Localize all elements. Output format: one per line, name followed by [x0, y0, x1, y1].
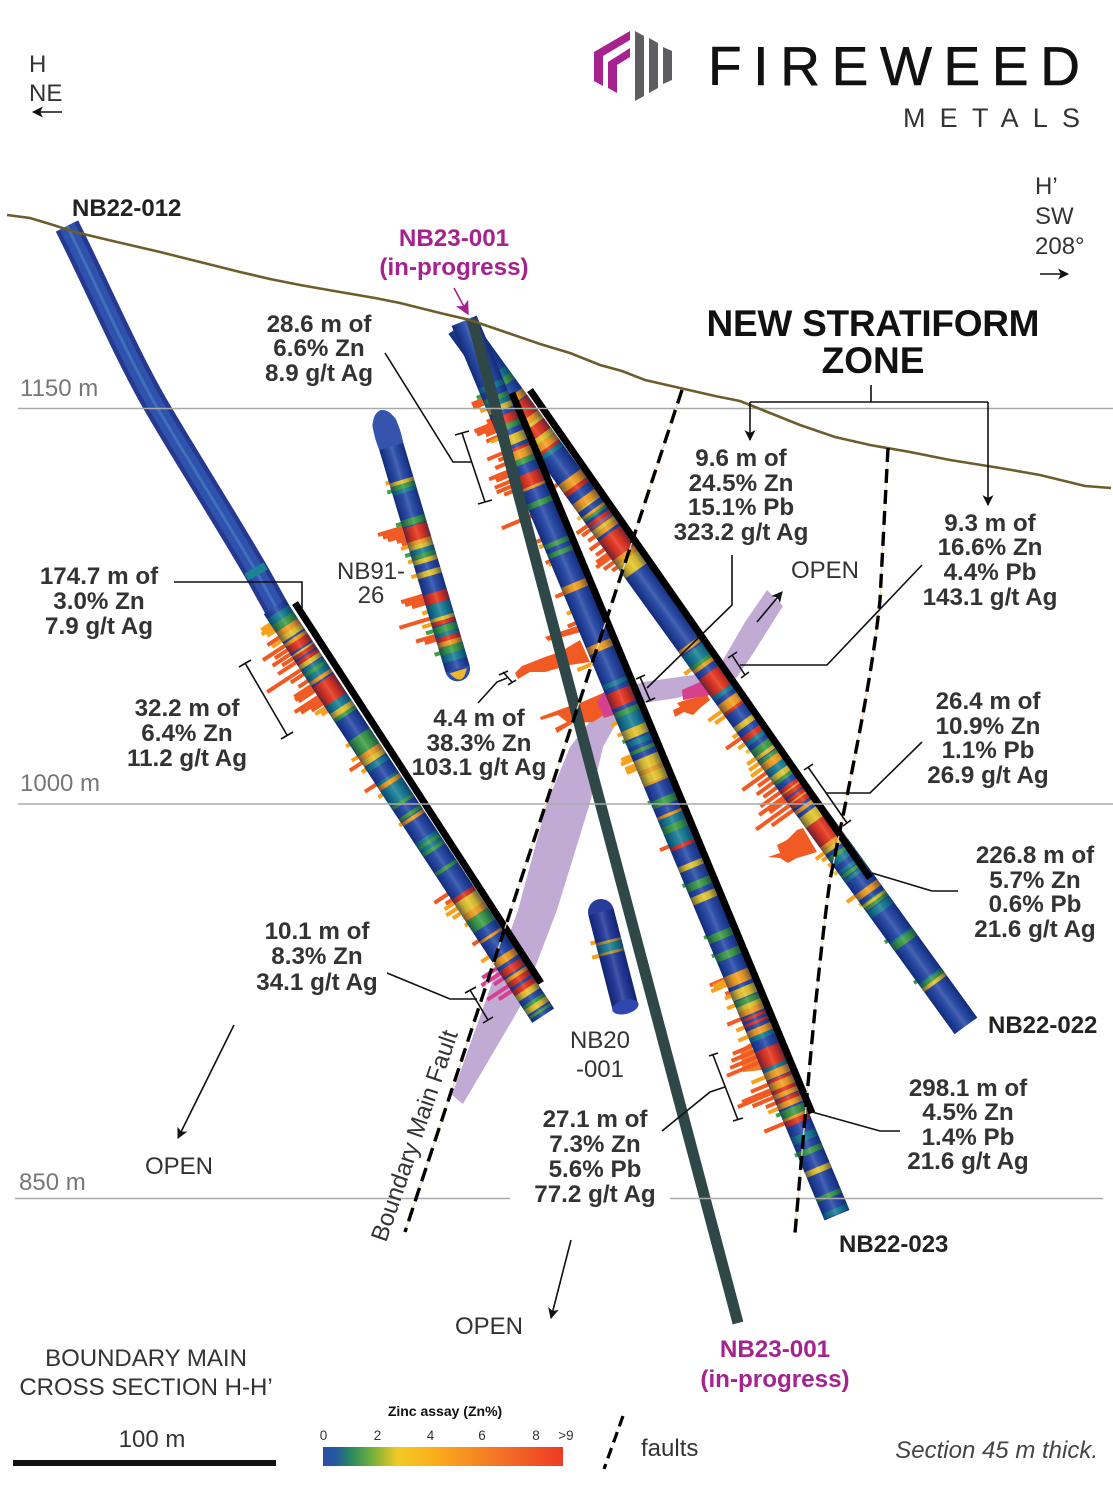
callout 28.6 m [265, 311, 492, 504]
fault: left dashed [405, 390, 682, 1232]
callout 32.2 m: 32.2 m of [135, 695, 240, 722]
callout 32.2 m: 6.4% Zn [141, 720, 233, 747]
hole label NB23-001 top: (in-progress) [379, 254, 529, 281]
callout 9.6 m: 9.6 m of [695, 445, 788, 472]
black intercept bar NB22-023 [512, 393, 812, 1113]
callout 298.1 m: 4.5% Zn [922, 1099, 1014, 1126]
section thickness note: Section 45 m thick. [895, 1437, 1098, 1464]
callout 298.1 m: 21.6 g/t Ag [907, 1148, 1029, 1175]
hole label NB22-023: NB22-023 [839, 1231, 948, 1258]
legend: zinc assay colour scale: 4 [427, 1428, 435, 1443]
legend: faults [604, 1416, 698, 1469]
section end label H NE: H [29, 51, 46, 78]
open label lower left: OPEN [145, 1153, 213, 1180]
hole label NB23-001 top: NB23-001 [399, 225, 509, 252]
elevation labels [19, 375, 100, 1196]
section end label H' SW: H’ [1035, 173, 1058, 200]
callout 9.3 m [728, 510, 1057, 678]
callout 4.4 m: 4.4 m of [433, 705, 526, 732]
elevation gridlines [15, 408, 1113, 1198]
heading: new stratiform zone: ZONE [822, 340, 924, 381]
hole label NB22-012: NB22-012 [72, 195, 181, 222]
callout 174.7 m [40, 563, 302, 640]
callout 4.4 m [412, 671, 546, 781]
open label and arrow: hole NE: OPEN [791, 557, 859, 584]
callout 26.4 m: 26.9 g/t Ag [927, 762, 1049, 789]
fault name label: Boundary Main Fault [366, 1026, 464, 1245]
legend: zinc assay colour scale [320, 1403, 574, 1466]
elevation labels: 850 m [19, 1169, 86, 1196]
callout 27.1 m: 7.3% Zn [549, 1131, 641, 1158]
logo wordmark: METALS [903, 103, 1080, 133]
section end label H' SW [1035, 173, 1085, 274]
callout 9.6 m: 323.2 g/t Ag [674, 519, 808, 546]
drill hole NB22-023 [418, 316, 849, 1234]
drill hole NB22-022 [415, 317, 977, 1058]
section title: BOUNDARY MAIN [45, 1345, 247, 1372]
mineralized segment NB22-012 [230, 600, 554, 1045]
callout 226.8 m [872, 842, 1096, 943]
arrow: open lower left [178, 1025, 234, 1138]
callout 226.8 m: 5.7% Zn [989, 867, 1081, 894]
hole label NB91-26: 26 [358, 582, 384, 609]
drill hole NB22-012 [67, 226, 554, 1045]
callout 28.6 m: 28.6 m of [267, 311, 372, 338]
open label bottom: OPEN [455, 1313, 523, 1340]
section end label H NE [29, 51, 62, 112]
section title [19, 1345, 273, 1401]
callout 26.4 m: 26.4 m of [936, 688, 1041, 715]
fault: right dashed [795, 448, 888, 1233]
callout 9.3 m: 4.4% Pb [944, 559, 1036, 586]
elevation labels: 1150 m [20, 375, 98, 402]
callout 298.1 m: 298.1 m of [909, 1075, 1028, 1102]
logo wordmark: FIREWEED [708, 35, 1080, 97]
heading: new stratiform zone [706, 303, 1040, 381]
legend: faults: faults [641, 1435, 698, 1462]
section end label H' SW: SW [1035, 203, 1074, 230]
hole label NB20-001: NB20 [570, 1027, 630, 1054]
black intercept bar NB22-012 [295, 603, 541, 983]
callout 4.4 m: 38.3% Zn [427, 730, 531, 757]
elevation labels: 1000 m [20, 770, 100, 797]
callout 32.2 m: 11.2 g/t Ag [127, 745, 247, 772]
scale bar 100 m: 100 m [119, 1426, 185, 1453]
black intercept bar NB22-022 [530, 390, 870, 878]
callout 4.4 m: 103.1 g/t Ag [412, 754, 546, 781]
callout 27.1 m: 77.2 g/t Ag [534, 1181, 656, 1208]
legend: zinc assay colour scale: 6 [478, 1428, 486, 1443]
callout 226.8 m: 0.6% Pb [989, 891, 1081, 918]
section end label H' SW: 208° [1035, 233, 1085, 260]
legend: zinc assay colour scale: 0 [320, 1428, 327, 1443]
hole label NB20-001 [570, 1027, 630, 1083]
logo wordmark [708, 35, 1080, 133]
callout 9.3 m: 143.1 g/t Ag [923, 584, 1057, 611]
legend: zinc assay colour scale: 2 [374, 1428, 381, 1443]
callout 32.2 m [127, 660, 293, 772]
legend: zinc assay colour scale: 8 [532, 1428, 540, 1443]
scale bar 100 m [13, 1426, 276, 1466]
callout 27.1 m: 5.6% Pb [549, 1156, 641, 1183]
callout 28.6 m: 6.6% Zn [273, 335, 365, 362]
callout 27.1 m: 27.1 m of [543, 1106, 648, 1133]
hole label NB23-001 bottom [700, 1336, 850, 1393]
callout 226.8 m: 226.8 m of [976, 842, 1095, 869]
ground surface line [7, 215, 1111, 488]
callout 174.7 m: 7.9 g/t Ag [45, 613, 153, 640]
hole label NB23-001 bottom: (in-progress) [700, 1366, 850, 1393]
callout 174.7 m: 174.7 m of [40, 563, 159, 590]
hole label NB91-26: NB91- [337, 558, 405, 585]
callout 9.3 m: 16.6% Zn [938, 534, 1042, 561]
callout 9.3 m: 9.3 m of [944, 510, 1037, 537]
legend: zinc assay colour scale: >9 [558, 1428, 574, 1443]
Boundary Main Fault purple band [452, 590, 783, 1104]
heading: new stratiform zone: NEW STRATIFORM [706, 303, 1040, 344]
callout 9.6 m [636, 445, 808, 702]
hole label NB23-001 top [379, 225, 529, 314]
stratiform zone arrows [750, 385, 988, 505]
callout 10.1 m: 34.1 g/t Ag [256, 969, 378, 996]
section end label H NE: NE [29, 80, 62, 107]
histogram solid clusters NB22-022 [673, 682, 817, 863]
drill hole NB20-001 [578, 896, 640, 1019]
hole label NB91-26 [337, 558, 405, 609]
callout 10.1 m: 8.3% Zn [271, 943, 363, 970]
callout 174.7 m: 3.0% Zn [53, 588, 145, 615]
callout 26.4 m [804, 688, 1049, 826]
section title: CROSS SECTION H-H’ [19, 1374, 273, 1401]
arrow: open bottom [551, 1240, 571, 1318]
callout 226.8 m: 21.6 g/t Ag [974, 916, 1096, 943]
callout 26.4 m: 10.9% Zn [936, 713, 1040, 740]
histogram solid clusters NB22-023 [515, 626, 762, 1072]
callout 298.1 m [812, 1075, 1029, 1175]
arrow: open up-right [757, 592, 782, 622]
hole label NB22-022: NB22-022 [988, 1012, 1097, 1039]
upper hole trace NB22-012 [67, 226, 282, 618]
hole body NB22-022 [415, 317, 977, 1058]
drill hole NB91-26 [338, 406, 473, 692]
logo icon [594, 31, 672, 101]
hole label NB20-001: -001 [576, 1056, 624, 1083]
callout 26.4 m: 1.1% Pb [942, 737, 1034, 764]
hole label NB23-001 bottom: NB23-001 [720, 1336, 830, 1363]
hole body NB22-023 [418, 316, 849, 1234]
callout 10.1 m: 10.1 m of [265, 918, 370, 945]
callout 27.1 m [534, 1053, 743, 1208]
callout 10.1 m [256, 918, 493, 1023]
callout 28.6 m: 8.9 g/t Ag [265, 360, 373, 387]
callout 298.1 m: 1.4% Pb [922, 1124, 1014, 1151]
legend: zinc assay colour scale: Zinc assay (Zn%) [388, 1403, 502, 1419]
callout 9.6 m: 15.1% Pb [688, 494, 794, 521]
callout 9.6 m: 24.5% Zn [689, 470, 793, 497]
drill hole NB23-001 dark trace [472, 319, 738, 1323]
